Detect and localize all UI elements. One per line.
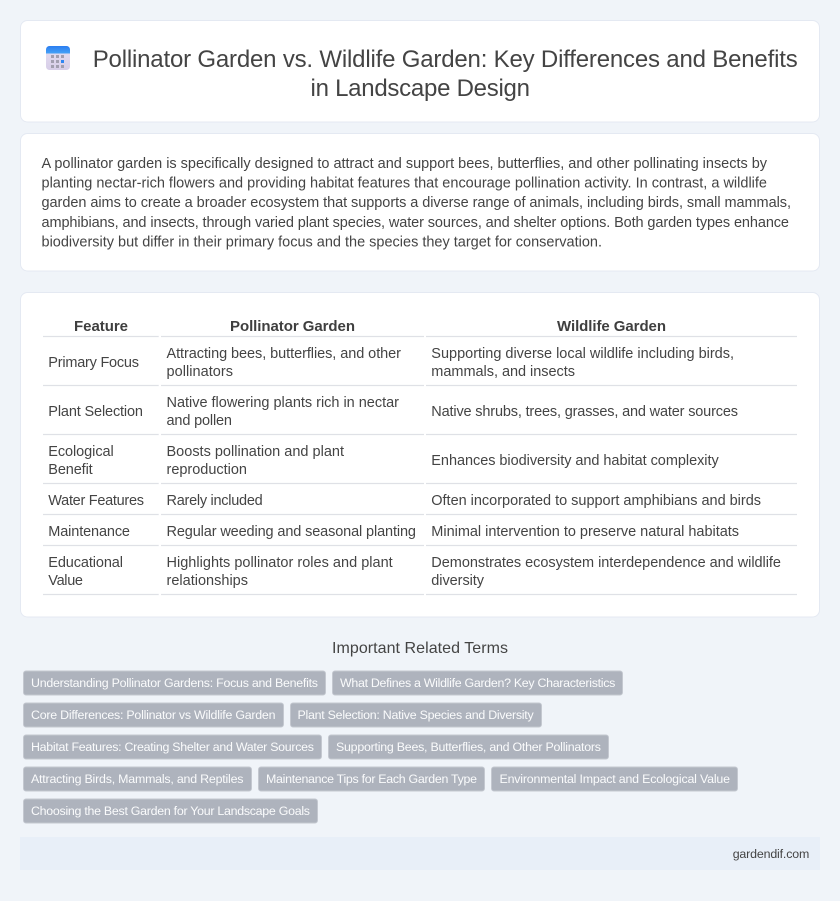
icon: calendar	[46, 46, 70, 70]
tag: Choosing the Best Garden for Your Landscape Goals	[31, 804, 310, 818]
tag	[24, 767, 252, 791]
tag	[332, 671, 622, 695]
row: primary focus: Supporting diverse local wildlife including birds,	[431, 346, 734, 362]
heading text	[93, 46, 798, 102]
tag: Attracting Birds, Mammals, and Reptiles	[31, 772, 244, 786]
row: ecological benefit: reproduction	[166, 462, 247, 478]
tag: Core Differences: Pollinator vs Wildlife Garden	[31, 708, 276, 722]
row: ecological benefit: Benefit	[48, 462, 93, 478]
row: plant selection: Native shrubs, trees, grasses, and water sources	[431, 404, 738, 420]
tag	[24, 671, 326, 695]
tag: Understanding Pollinator Gardens: Focus and Benefits	[31, 676, 318, 690]
section heading: related terms: Important Related Terms	[332, 640, 508, 657]
tag	[24, 735, 322, 759]
intro paragraph: A pollinator garden is specifically designed to attract and support bees, butterflies, and other pollinating insects by	[42, 156, 768, 172]
row: primary focus	[48, 346, 734, 380]
row: plant selection: Native flowering plants rich in nectar	[166, 395, 399, 411]
row: educational value: diversity	[431, 573, 485, 589]
row: maintenance: Regular weeding and seasonal planting	[166, 524, 416, 540]
footer source text: gardendif.com	[733, 847, 809, 861]
row: plant selection	[48, 395, 738, 429]
heading text: in Landscape Design	[310, 75, 530, 102]
tag: Environmental Impact and Ecological Value	[500, 772, 730, 786]
row: maintenance: Minimal intervention to preserve natural habitats	[431, 524, 739, 540]
row: educational value: Highlights pollinator roles and plant	[166, 555, 393, 571]
tag: Maintenance Tips for Each Garden Type	[266, 772, 477, 786]
row: educational value: Educational	[48, 555, 123, 571]
row: primary focus: mammals, and insects	[431, 364, 575, 380]
row: ecological benefit: Enhances biodiversity and habitat complexity	[431, 453, 719, 469]
tag	[258, 767, 484, 791]
row: educational value: Demonstrates ecosystem interdependence and wildlife	[431, 555, 781, 571]
row: water features	[48, 493, 761, 509]
row: primary focus: Primary Focus	[48, 355, 139, 371]
panel: title	[20, 20, 820, 122]
related term tags	[24, 671, 738, 823]
panel: introduction	[20, 134, 820, 271]
table header row: Feature	[74, 318, 128, 335]
table header row: Wildlife Garden	[557, 318, 666, 335]
tag	[328, 735, 608, 759]
intro paragraph: planting nectar-rich flowers and providing habitat features that encourage pollination activity. In contrast, a wildlife	[42, 176, 767, 192]
tag	[290, 703, 542, 727]
tag	[24, 799, 318, 823]
row: primary focus: pollinators	[166, 364, 233, 380]
tag: Plant Selection: Native Species and Diversity	[298, 708, 534, 722]
table header row	[74, 318, 666, 335]
row: educational value: relationships	[166, 573, 248, 589]
row: primary focus: Attracting bees, butterflies, and other	[166, 346, 401, 362]
tag: Supporting Bees, Butterflies, and Other Pollinators	[336, 740, 601, 754]
row: ecological benefit	[48, 444, 719, 478]
row: educational value: Value	[48, 573, 83, 589]
row: maintenance	[48, 524, 739, 540]
intro paragraph: amphibians, and insects, through varied plant species, water sources, and shelter options. Both garden types enhance	[42, 215, 789, 231]
tag	[492, 767, 738, 791]
tag: Habitat Features: Creating Shelter and Water Sources	[31, 740, 314, 754]
table header row: Pollinator Garden	[230, 318, 355, 335]
row: ecological benefit: Boosts pollination and plant	[166, 444, 344, 460]
row: maintenance: Maintenance	[48, 524, 130, 540]
panel: comparison table	[20, 292, 820, 617]
heading text: Pollinator Garden vs. Wildlife Garden: Key Differences and Benefits	[93, 46, 798, 73]
footer bar	[20, 837, 820, 870]
row: plant selection: Plant Selection	[48, 404, 143, 420]
row: educational value	[48, 555, 781, 589]
tag: What Defines a Wildlife Garden? Key Characteristics	[340, 676, 615, 690]
row: plant selection: and pollen	[166, 413, 232, 429]
row: water features: Water Features	[48, 493, 144, 509]
intro paragraph	[42, 156, 791, 250]
row: water features: Often incorporated to support amphibians and birds	[431, 493, 761, 509]
intro paragraph: biodiversity but differ in their primary focus and the species they target for conservation.	[42, 234, 602, 250]
tag	[24, 703, 284, 727]
row: ecological benefit: Ecological	[48, 444, 114, 460]
row: water features: Rarely included	[166, 493, 263, 509]
intro paragraph: garden aims to create a broader ecosystem that supports a diverse range of animals, including birds, small mammals,	[42, 195, 791, 211]
